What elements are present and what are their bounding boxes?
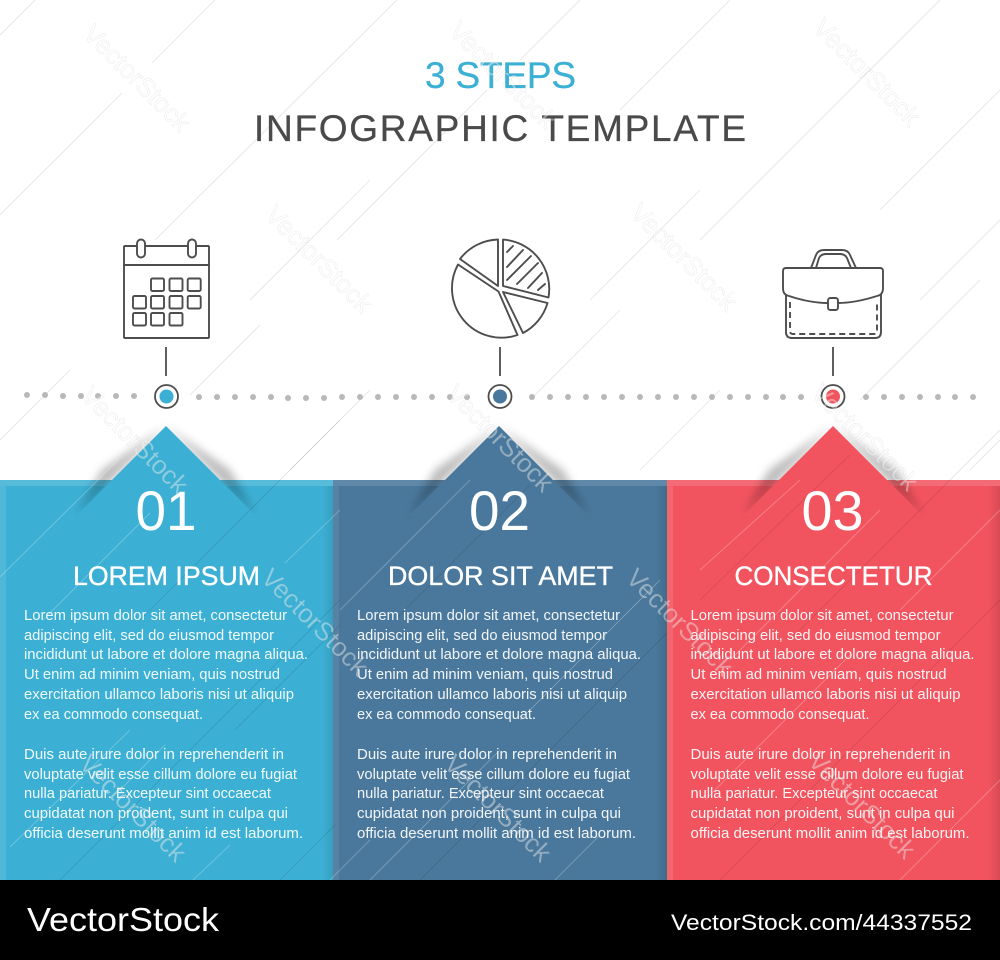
step 2 body text: exercitation ullamco laboris nisi ut aliquip (357, 686, 627, 703)
marker: step 2 (488, 385, 512, 408)
step 1 body text: ex ea commodo consequat. (24, 706, 203, 723)
watermarks: VectorStock (620, 562, 740, 682)
step 1 body text (24, 607, 308, 842)
title: INFOGRAPHIC TEMPLATE (254, 108, 746, 149)
step 2 body text (357, 607, 641, 842)
watermarks: VectorStock (624, 197, 744, 317)
step 1 body text: Lorem ipsum dolor sit amet, consectetur (24, 607, 287, 624)
dotted timeline (24, 392, 976, 401)
watermarks: VectorStock (259, 199, 379, 319)
step 3 number: 03 (802, 479, 864, 542)
icon: calendar (124, 240, 209, 338)
step 1 body text: Ut enim ad minim veniam, quis nostrud (24, 666, 280, 683)
connector: step 3 stem (832, 347, 834, 376)
step 1 body text: voluptate velit esse cillum dolore eu fugiat (24, 766, 298, 783)
step 1 body text: exercitation ullamco laboris nisi ut aliquip (24, 686, 294, 703)
panel: step 2 navy (333, 426, 667, 880)
step 1 body text: nulla pariatur. Excepteur sint occaecat (24, 785, 272, 802)
step 2 body text: voluptate velit esse cillum dolore eu fugiat (357, 766, 631, 783)
step 2 number: 02 (469, 479, 530, 542)
watermarks: VectorStock (805, 377, 925, 497)
step 3 body text: ex ea commodo consequat. (690, 706, 870, 723)
step 2 body text: Ut enim ad minim veniam, quis nostrud (357, 666, 613, 683)
step 1 body text: officia deserunt mollit anim id est laborum. (24, 825, 303, 842)
step 1 heading: LOREM IPSUM (73, 561, 260, 591)
step 1 body text: cupidatat non proident, sunt in culpa qui (24, 805, 288, 822)
step 3 body text: Ut enim ad minim veniam, quis nostrud (690, 666, 946, 683)
step 2 body text: cupidatat non proident, sunt in culpa qui (357, 805, 621, 822)
title: 3 STEPS (425, 55, 576, 96)
step 3 body text: exercitation ullamco laboris nisi ut aliquip (690, 686, 960, 703)
marker: step 1 (155, 385, 178, 408)
watermarks: VectorStock (440, 378, 560, 498)
step 3 body text: cupidatat non proident, sunt in culpa qui (690, 805, 954, 822)
step 2 body text: incididunt ut labore et dolore magna aliqua. (357, 646, 641, 663)
step 2 body text: Lorem ipsum dolor sit amet, consectetur (357, 607, 620, 624)
watermarks: VectorStock (438, 748, 558, 868)
watermarks: VectorStock (807, 12, 927, 132)
watermarks: VectorStock (443, 15, 563, 135)
watermarks: VectorStock (77, 18, 197, 138)
step 3 body text: incididunt ut labore et dolore magna aliqua. (690, 646, 974, 663)
step 1 number: 01 (136, 479, 196, 542)
step 2 body text: ex ea commodo consequat. (357, 706, 536, 723)
connector: step 2 stem (499, 347, 501, 376)
step 3 body text (690, 607, 974, 842)
step 1 body text: adipiscing elit, sed do eiusmod tempor (24, 627, 274, 644)
icon: briefcase (783, 250, 883, 338)
step 2 body text: officia deserunt mollit anim id est laborum. (357, 825, 636, 842)
marker: step 3 (822, 385, 844, 408)
title (254, 55, 746, 149)
connector: step 1 stem (165, 347, 167, 376)
step 3 body text: nulla pariatur. Excepteur sint occaecat (690, 785, 938, 802)
footer bar: VectorStock (27, 901, 220, 938)
icon: pie chart (452, 240, 549, 338)
watermarks: VectorStock (255, 562, 375, 682)
panel: step 3 red (667, 426, 1000, 880)
step 1 body text: incididunt ut labore et dolore magna aliqua. (24, 646, 308, 663)
watermarks: VectorStock (73, 748, 193, 868)
step 2 body text: adipiscing elit, sed do eiusmod tempor (357, 627, 607, 644)
step 3 body text: adipiscing elit, sed do eiusmod tempor (690, 627, 941, 644)
step 2 body text: Duis aute irure dolor in reprehenderit in (357, 746, 617, 763)
footer bar: VectorStock.com/44337552 (671, 910, 972, 935)
step 3 body text: Lorem ipsum dolor sit amet, consectetur (690, 607, 954, 624)
step 2 heading: DOLOR SIT AMET (388, 561, 613, 591)
step 3 heading: CONSECTETUR (734, 561, 932, 591)
step 3 body text: Duis aute irure dolor in reprehenderit in (690, 746, 950, 763)
step 3 body text: officia deserunt mollit anim id est laborum. (690, 825, 970, 842)
step 1 body text: Duis aute irure dolor in reprehenderit in (24, 746, 284, 763)
step 3 body text: voluptate velit esse cillum dolore eu fugiat (690, 766, 964, 783)
watermarks: VectorStock (802, 745, 922, 865)
panel: step 1 blue (0, 426, 334, 880)
watermarks (73, 12, 927, 868)
footer bar (0, 880, 1000, 960)
step 2 body text: nulla pariatur. Excepteur sint occaecat (357, 785, 605, 802)
watermarks: VectorStock (75, 380, 195, 500)
